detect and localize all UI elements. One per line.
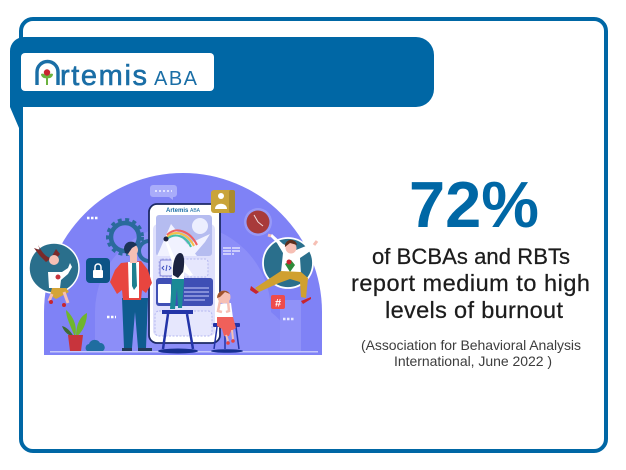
icon: clock (244, 208, 272, 236)
statistic: 72% (409, 168, 539, 241)
dots (87, 218, 116, 317)
description (351, 244, 590, 323)
floor line (50, 351, 318, 352)
plant (62, 310, 87, 351)
chat bubble (150, 185, 177, 200)
girl in circle (29, 243, 79, 307)
citation (361, 337, 581, 369)
logo ABA: ABA (154, 68, 198, 90)
phone screen panel (153, 224, 215, 336)
child on stool (211, 290, 243, 353)
sky tile (156, 215, 212, 256)
logo wordmark: rtemis (60, 60, 147, 92)
inner dome (95, 224, 300, 351)
icon: person tile (211, 190, 235, 213)
code tile (159, 259, 208, 277)
cloud (86, 340, 105, 351)
logo (21, 53, 214, 92)
citation: International, June 2022 ) (394, 353, 552, 369)
description: levels of burnout (385, 297, 563, 323)
illustration (29, 173, 322, 355)
white lines (223, 248, 240, 254)
description: report medium to high (351, 270, 590, 296)
icon: hashtag tile: # (275, 298, 281, 310)
citation: (Association for Behavioral Analysis (361, 337, 581, 353)
header banner (10, 37, 434, 130)
blue window (156, 278, 213, 306)
phone logo text: Artemis ABA (166, 208, 201, 214)
gears (108, 220, 159, 261)
woman on stool (158, 236, 198, 354)
lower tile (155, 311, 212, 336)
icon: hashtag tile (271, 295, 285, 310)
logo arch icon (37, 62, 58, 85)
man in red jacket (110, 242, 152, 351)
dome background (44, 173, 322, 355)
description: of BCBAs and RBTs (372, 244, 570, 269)
jumping man in circle (250, 234, 317, 304)
phone (149, 204, 220, 343)
right column (280, 300, 301, 351)
lock tile (86, 258, 110, 283)
dots right (283, 318, 294, 320)
